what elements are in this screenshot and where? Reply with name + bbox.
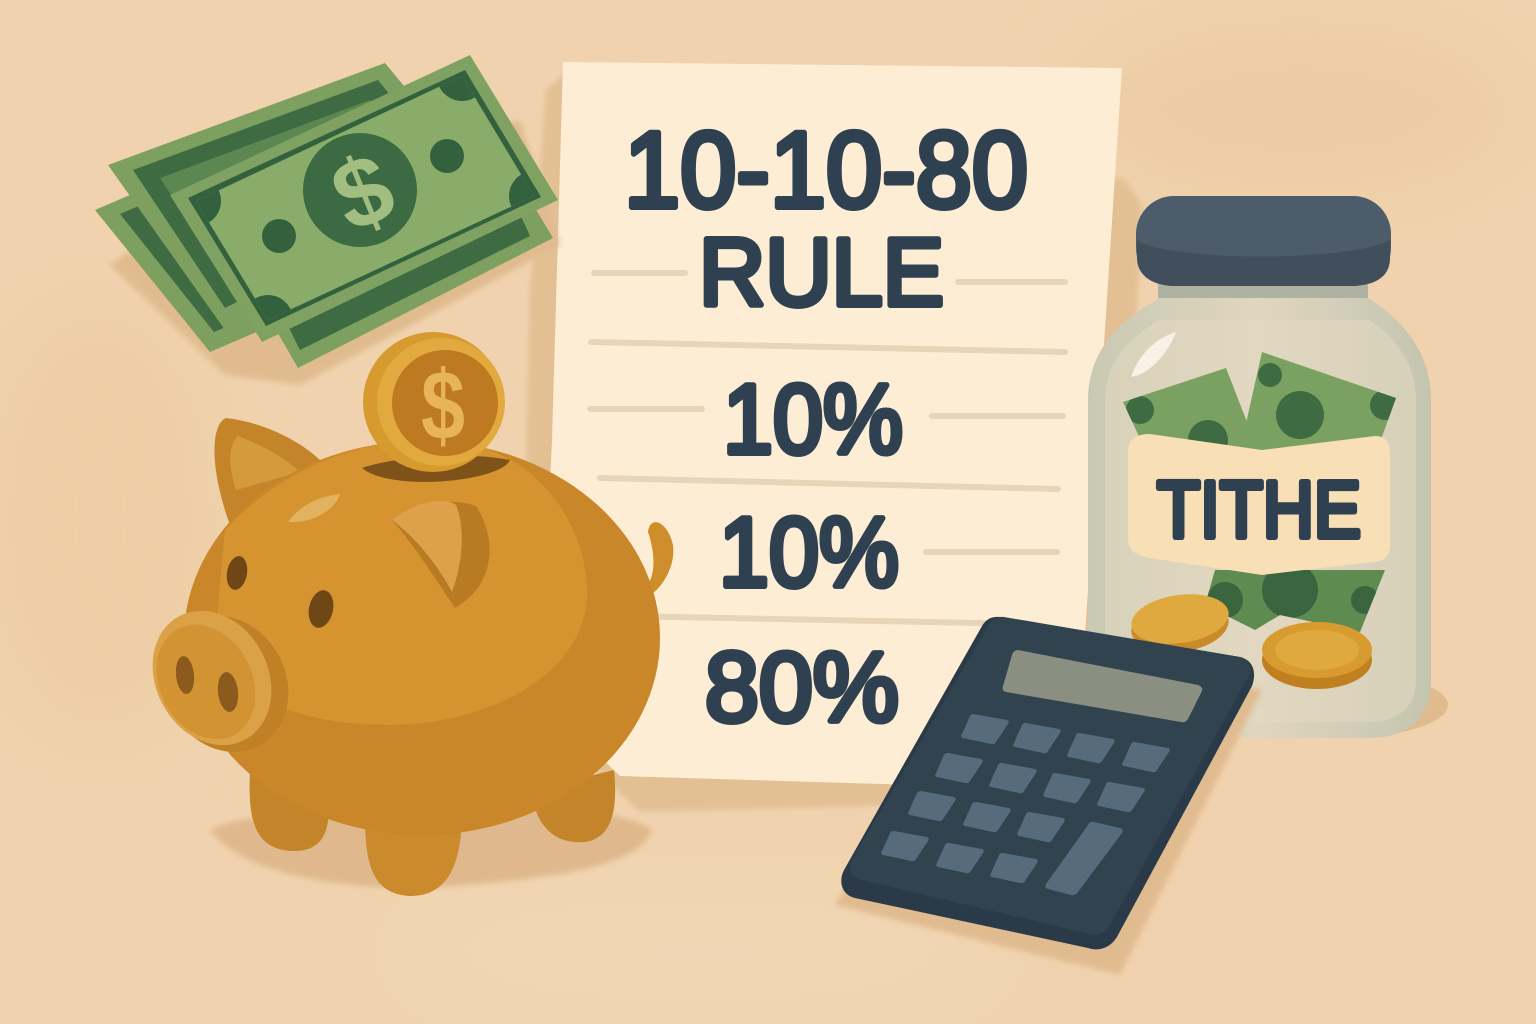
coin xyxy=(363,332,505,472)
coin: $ xyxy=(421,350,465,460)
lid xyxy=(1136,196,1391,298)
icon: stack of dollar bills xyxy=(95,51,560,385)
snout xyxy=(140,594,312,774)
calculator shadow xyxy=(835,640,1262,975)
highlight xyxy=(1131,332,1176,377)
front bill xyxy=(170,51,559,345)
calculator screen xyxy=(1003,650,1202,722)
panel: paper sheet xyxy=(540,62,1122,790)
paper shadow xyxy=(520,75,1142,812)
near ear xyxy=(392,502,490,608)
slot xyxy=(362,456,510,482)
jar shadow xyxy=(1232,672,1448,738)
lower bill xyxy=(230,150,553,368)
percentage: 80%: 80% xyxy=(705,632,899,742)
bottom bill xyxy=(95,100,470,352)
coins in jar xyxy=(1128,588,1372,689)
tail xyxy=(640,522,673,598)
icon: tithe jar xyxy=(1088,196,1431,738)
jar label: TITHE xyxy=(1157,465,1361,554)
middle bill xyxy=(108,63,490,330)
jar label xyxy=(1128,434,1390,575)
bills in jar xyxy=(1123,352,1400,632)
eyes xyxy=(224,555,250,591)
front bill: $ xyxy=(317,131,409,253)
icon: piggy bank xyxy=(130,332,673,896)
glass xyxy=(1088,298,1431,738)
calculator keys xyxy=(881,714,1170,895)
title xyxy=(624,109,1028,326)
legs xyxy=(250,770,329,851)
title: RULE xyxy=(699,219,944,326)
title: 10-10-80 xyxy=(624,109,1028,230)
far ear xyxy=(214,418,322,525)
body xyxy=(184,441,660,835)
pig shadow xyxy=(210,804,652,888)
icon: calculator xyxy=(841,617,1254,949)
percentage: 10% first: 10% xyxy=(723,364,903,474)
highlight xyxy=(288,494,340,522)
percentage: 10% second: 10% xyxy=(719,497,899,607)
